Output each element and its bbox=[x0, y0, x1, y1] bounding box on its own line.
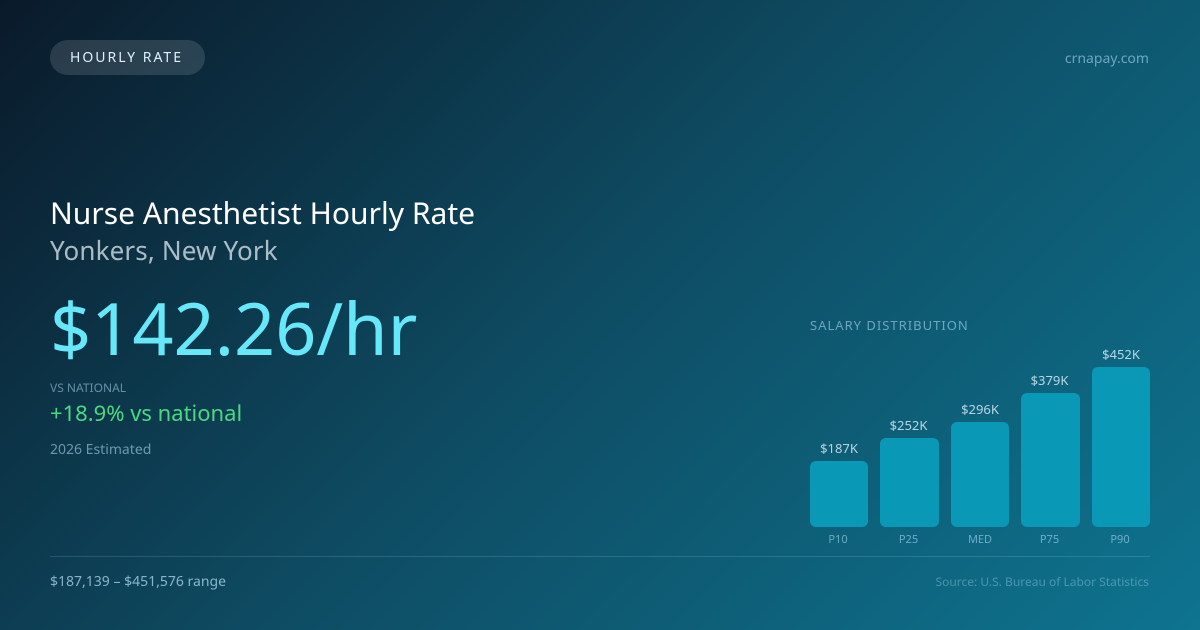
badge: hourly rate bbox=[50, 40, 205, 75]
bar P25: $252K bbox=[890, 416, 927, 434]
bar P10: P10 bbox=[828, 532, 848, 547]
bar P90 bbox=[1092, 345, 1150, 547]
hourly rate value: $142.26/hr bbox=[50, 279, 417, 377]
bar P25: P25 bbox=[899, 532, 918, 547]
bar P75 bbox=[1021, 371, 1080, 547]
bar P75: $379K bbox=[1031, 371, 1068, 389]
bar P75: P75 bbox=[1040, 532, 1059, 547]
bar P10: $187K bbox=[820, 439, 858, 457]
bar MED: MED bbox=[968, 532, 992, 547]
badge: hourly rate: HOURLY RATE bbox=[70, 48, 183, 67]
site name: crnapay.com bbox=[1065, 49, 1149, 68]
bar P90: $452K bbox=[1102, 345, 1140, 363]
comparison label: VS NATIONAL bbox=[50, 379, 126, 396]
bar MED bbox=[951, 400, 1009, 547]
bar P25 bbox=[880, 416, 939, 547]
salary range: $187,139 – $451,576 range bbox=[50, 572, 226, 591]
comparison value: +18.9% vs national bbox=[50, 398, 242, 428]
subtitle: location: Yonkers, New York bbox=[50, 232, 278, 268]
chart heading: SALARY DISTRIBUTION bbox=[810, 316, 969, 334]
bar MED: $296K bbox=[961, 400, 999, 418]
bar P90: P90 bbox=[1110, 532, 1130, 547]
source note: Source: U.S. Bureau of Labor Statistics bbox=[936, 573, 1149, 590]
estimate year: 2026 Estimated bbox=[50, 440, 151, 459]
title: Nurse Anesthetist Hourly Rate bbox=[50, 192, 475, 233]
bar chart: salary distribution bbox=[810, 345, 1150, 547]
bar P10 bbox=[810, 439, 868, 547]
